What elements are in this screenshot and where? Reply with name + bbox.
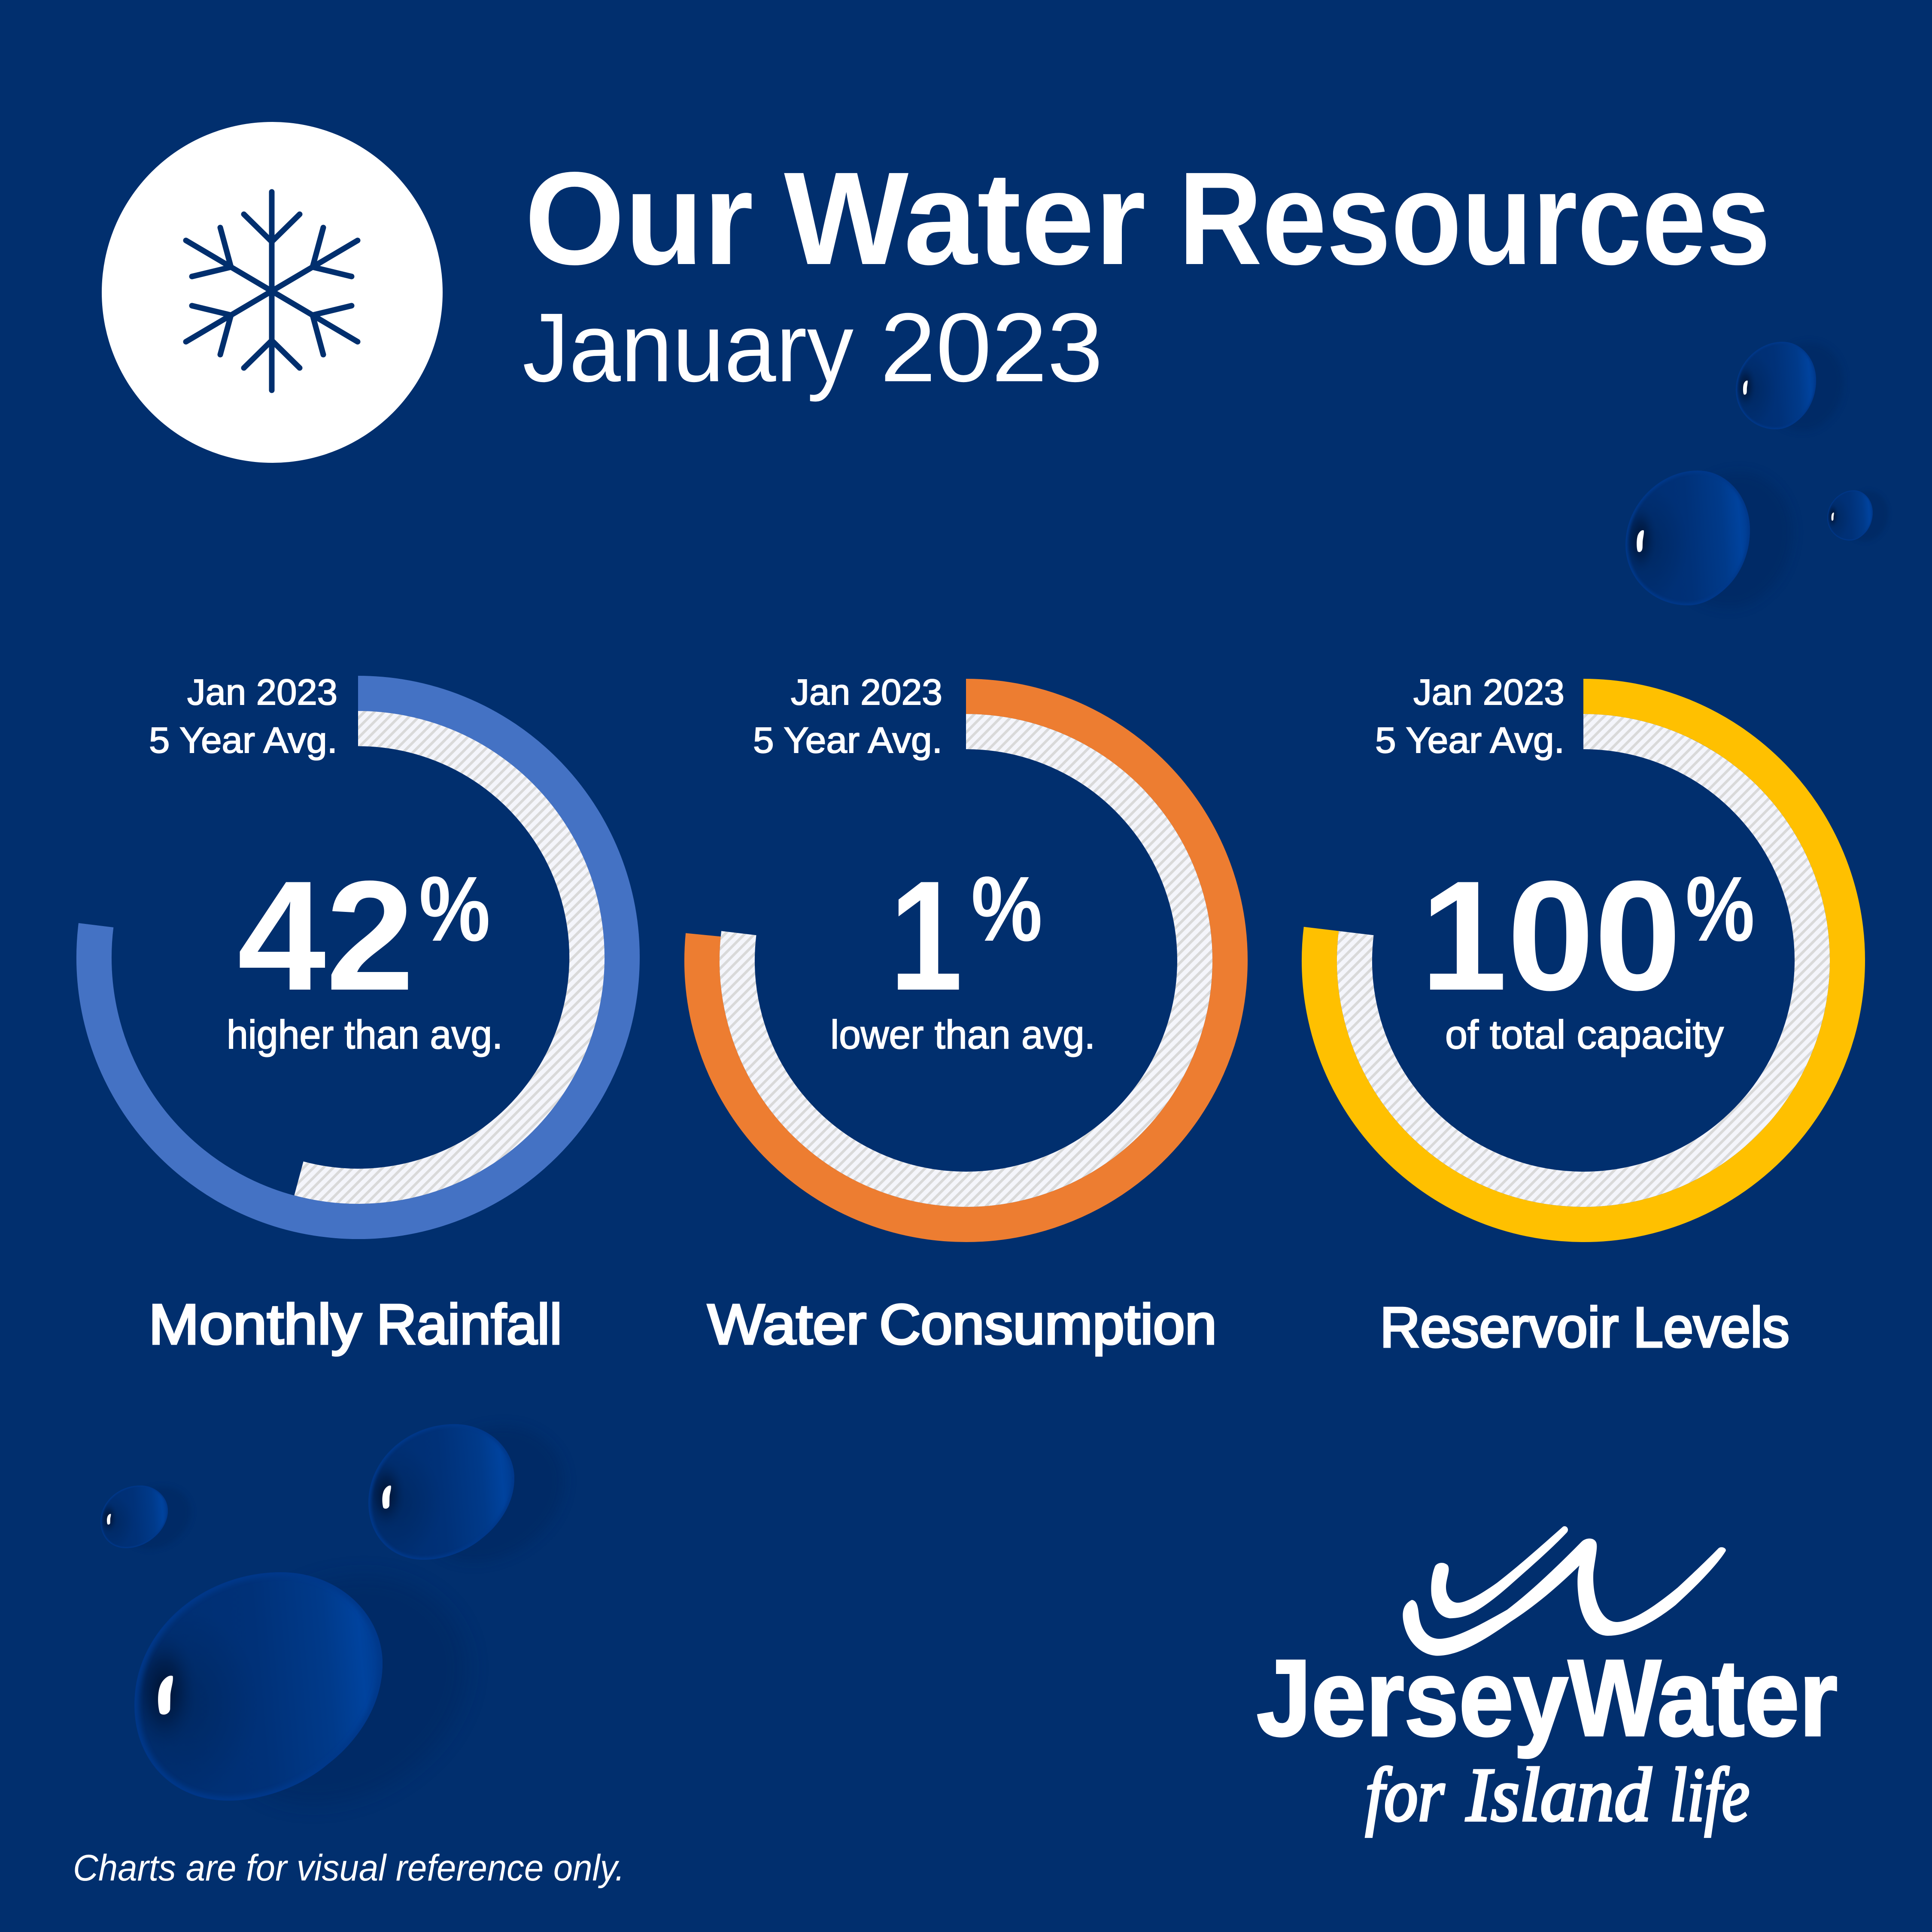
value 1% <box>890 848 1042 1023</box>
ring: Jan 2023 rainfall <box>94 693 622 1221</box>
logo tagline: life <box>1670 1752 1750 1837</box>
heading <box>149 1293 562 1356</box>
title <box>525 145 1771 292</box>
value 42% <box>237 848 490 1023</box>
legend labels <box>1375 672 1564 760</box>
value 1%: % <box>971 857 1042 960</box>
ring: Jan 2023 consumption <box>702 696 1230 1224</box>
logo wave mark <box>1403 1526 1726 1656</box>
caption: of total capacity <box>1445 1012 1724 1057</box>
legend labels: 5 Year Avg. <box>753 720 942 760</box>
heading: Monthly <box>149 1293 361 1356</box>
subtitle <box>522 293 1103 402</box>
logo tagline: Island <box>1466 1752 1652 1837</box>
value 100%: 100 <box>1420 848 1681 1023</box>
legend labels <box>753 672 942 760</box>
logo tagline: for <box>1365 1752 1445 1837</box>
legend labels <box>149 672 337 760</box>
title: Our <box>525 145 753 292</box>
caption: lower than avg. <box>830 1012 1095 1057</box>
logo wordmark: JerseyWater <box>1257 1637 1838 1759</box>
value 42%: 42 <box>237 848 414 1023</box>
heading <box>708 1293 1217 1356</box>
legend labels: Jan 2023 <box>791 672 942 712</box>
icon: snowflake badge <box>102 122 443 463</box>
heading: Consumption <box>879 1293 1217 1356</box>
logo tagline <box>1365 1752 1750 1837</box>
legend labels: 5 Year Avg. <box>149 720 337 760</box>
legend labels: Jan 2023 <box>187 672 337 712</box>
value 1%: 1 <box>890 848 963 1023</box>
title: Water <box>784 145 1146 292</box>
title: Resources <box>1179 145 1771 292</box>
caption: higher than avg. <box>227 1012 503 1057</box>
logo: Jersey Water <box>1257 1526 1838 1837</box>
ring: 5 year average reservoir <box>1355 732 1812 1189</box>
ring: 5 year average rainfall <box>299 729 587 1186</box>
heading <box>1380 1296 1789 1359</box>
water drop, top right small <box>1823 490 1888 541</box>
ring: 5 year average consumption <box>737 732 1195 1189</box>
legend labels: Jan 2023 <box>1413 672 1564 712</box>
water drop, bottom left medium <box>354 1424 564 1562</box>
subtitle: January <box>522 293 854 402</box>
footnote: Charts are for visual reference only. <box>73 1847 625 1889</box>
value 42%: % <box>419 857 490 960</box>
panel: reservoir levels <box>1319 672 1847 1359</box>
water drop, bottom left large <box>109 1572 467 1804</box>
water drop, bottom left small <box>94 1485 191 1549</box>
value 100%: % <box>1686 857 1755 960</box>
water drop, top right large <box>1613 471 1792 608</box>
heading: Water <box>708 1293 866 1356</box>
ring: Jan 2023 reservoir <box>1319 696 1847 1224</box>
heading: Reservoir <box>1380 1296 1619 1359</box>
panel: monthly rainfall <box>94 672 622 1356</box>
heading: Levels <box>1633 1296 1789 1359</box>
subtitle: 2023 <box>880 293 1103 402</box>
legend labels: 5 Year Avg. <box>1375 720 1564 760</box>
heading: Rainfall <box>377 1293 562 1356</box>
panel: water consumption <box>702 672 1230 1356</box>
water drop, top right medium <box>1728 342 1844 431</box>
